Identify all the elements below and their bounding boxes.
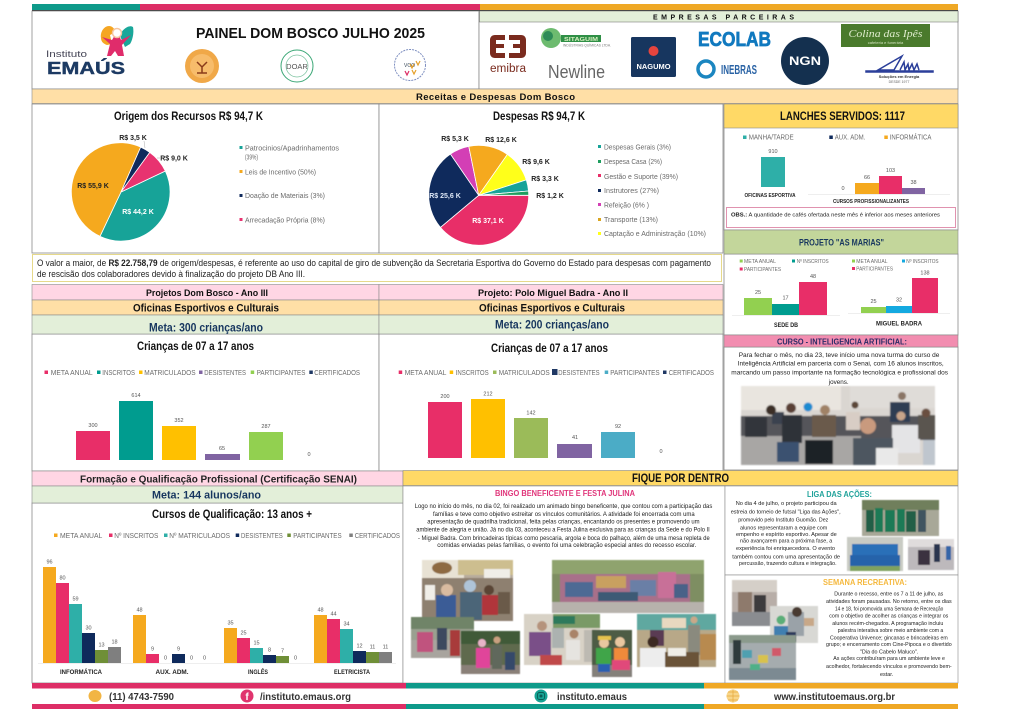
legend: origem: (39%) <box>245 154 258 162</box>
heading: empresas parceiras: EMPRESAS PARCEIRAS <box>653 14 794 22</box>
text block: empenho e espírito esportivo. Apesar de <box>736 532 837 538</box>
pie labels: R$ 5,3 K <box>441 136 469 143</box>
bar chart: cursos: CURSOS PROFISSIONALIZANTES <box>833 199 910 205</box>
group: informática <box>43 560 121 676</box>
bar chart: cursos <box>38 560 396 676</box>
bar chart: 212 <box>483 392 493 398</box>
legend: miguel badra: META ANUAL <box>856 259 888 265</box>
pie labels <box>429 136 564 225</box>
callout: observação <box>726 208 956 228</box>
group: informática: INFORMÁTICA <box>60 669 103 676</box>
legend: INFORMÁTICA <box>890 132 932 142</box>
group: inglês: 35 <box>227 620 234 626</box>
bar chart: 92 <box>615 424 621 430</box>
text block <box>731 352 949 386</box>
logo: Sitaguim <box>541 28 611 48</box>
icon: facebook: f <box>245 692 249 703</box>
text block: famílias e teve como objetivo estreitar os vínculos comunitários. A atividade foi encerrada com uma <box>433 512 695 518</box>
photo: grupo de crianças <box>552 560 704 613</box>
group: informática: 30 <box>85 626 92 632</box>
legend: META ANUAL <box>51 370 93 377</box>
logo: emibra <box>490 35 527 75</box>
text block <box>415 504 712 549</box>
legend <box>54 533 400 540</box>
bar chart: cursos: 0 <box>841 186 845 192</box>
text block: No dia 4 de julho, o projeto participou da <box>736 501 837 507</box>
panel: projeto as marias <box>724 230 958 335</box>
text block: Inteligência Artificial em parceria com o Senai, com 16 alunos inscritos, <box>738 360 944 368</box>
group: informática: 59 <box>72 596 79 602</box>
legend: origem: Leis de Incentivo (50%) <box>245 170 316 176</box>
pie labels: R$ 12,6 K <box>485 137 517 144</box>
heading: as marias: PROJETO "AS MARIAS" <box>799 238 884 248</box>
legend: despesas <box>598 144 706 238</box>
title: PAINEL DOM BOSCO JULHO 2025 <box>196 25 425 42</box>
text block: percussão, trazendo cultura e integração. <box>739 561 837 567</box>
bar chart: 0 <box>659 449 663 455</box>
heading: oficinas <box>379 300 723 315</box>
bar chart <box>76 393 311 460</box>
bar chart: sede DB: 48 <box>810 274 816 280</box>
heading: fique por dentro <box>403 470 958 486</box>
logo: Colina das Ipês: Colina das Ipês <box>848 29 923 40</box>
legend: sede: Nº INSCRITOS <box>797 258 829 265</box>
group: aux. adm.: 48 <box>136 608 143 614</box>
bar chart: miguel badra: MIGUEL BADRA <box>876 320 922 328</box>
legend: despesas: Instrutores (27%) <box>604 188 659 195</box>
group: eletricista: 11 <box>383 644 388 650</box>
pie labels: R$ 55,9 K <box>77 183 109 190</box>
bar chart: sede DB <box>732 274 840 329</box>
logo: Colina das Ipês: cafeteria e funerária <box>868 40 904 45</box>
logo: NGN: NGN <box>789 54 821 68</box>
top colour bar <box>32 4 958 11</box>
group: eletricista: 12 <box>356 644 363 650</box>
logo: Nagumo: NAGUMO <box>636 64 671 71</box>
heading: lanches: LANCHES SERVIDOS: 1117 <box>780 111 905 123</box>
pie chart: despesas <box>429 145 529 245</box>
icon: phone <box>88 690 102 702</box>
photo: bonecos caipiras <box>592 630 632 677</box>
heading: semana: SEMANA RECREATIVA: <box>823 577 907 587</box>
group: informática: 13 <box>98 642 105 648</box>
bar chart: 65 <box>219 446 225 452</box>
pie labels: R$ 3,5 K <box>119 135 147 142</box>
panel: lanches servidos <box>724 104 958 230</box>
group: inglês <box>224 620 297 676</box>
legend <box>743 132 932 142</box>
phone number: (11) 4743-7590 <box>109 692 174 703</box>
heading: empresas parceiras <box>480 11 958 22</box>
legend: PARTICIPANTES <box>293 533 342 540</box>
heading: formação <box>32 471 403 486</box>
note box <box>32 254 722 282</box>
group: eletricista: 48 <box>317 608 324 614</box>
bar chart: 142 <box>526 410 536 416</box>
heading: meta: Meta: 144 alunos/ano <box>152 490 261 502</box>
chart title: Crianças de 07 a 17 anos <box>137 341 254 353</box>
legend: MATRICULADOS <box>144 370 196 377</box>
group: inglês: 8 <box>268 648 271 654</box>
legend: Nº MATRICULADOS <box>169 533 230 540</box>
logo: Sitaguim: INDÚSTRIAS QUÍMICAS LTDA. <box>563 42 611 48</box>
legend: origem <box>240 146 340 224</box>
legend: miguel badra: PARTICIPANTES <box>856 266 893 272</box>
heading: as marias <box>724 230 958 254</box>
seal: DOAR <box>281 50 313 82</box>
website: www.institutoemaus.org.br <box>773 692 895 703</box>
text block: apresentação de quadrilha tradicional, feita pelas crianças, encantando os presentes e promovendo um <box>427 520 700 526</box>
heading: fique por dentro: FIQUE POR DENTRO <box>632 473 729 485</box>
bar chart: miguel badra: 32 <box>896 298 902 304</box>
text block: - Miguel Badra. Com brincadeiras típicas como pescaria, argola e boca do palhaço, além de uma mesa repleta de <box>418 536 710 542</box>
legend: despesas: Refeição (6% ) <box>604 202 649 210</box>
legend <box>44 370 360 377</box>
legend <box>399 369 714 377</box>
pie labels: R$ 37,1 K <box>472 218 504 225</box>
photo: time azul <box>847 537 903 571</box>
text block: "Dia do Cabelo Maluco". <box>860 650 919 656</box>
facebook handle: /instituto.emaus.org <box>260 692 351 703</box>
chart title: Crianças de 07 a 17 anos <box>491 343 608 355</box>
logo: Nagumo <box>631 37 676 77</box>
text block: As ações contribuíram para um ambiente leve e <box>833 656 945 662</box>
panel: formação e qualificação <box>32 471 403 683</box>
legend: miguel badra <box>852 258 939 272</box>
seal: orange <box>185 49 219 83</box>
group: inglês: 7 <box>281 648 284 654</box>
group: aux. adm.: 9 <box>177 646 180 652</box>
note box: de rescisão dos colaboradores devido à finalização do projeto DB Ano III. <box>37 269 305 280</box>
logo: Instituto Emaús: Instituto <box>46 49 87 59</box>
bar chart: 287 <box>261 424 271 430</box>
icon: website globe <box>726 690 740 702</box>
bar chart: 614 <box>131 393 141 399</box>
text block: jovens. <box>828 379 849 386</box>
bar chart: oficinas: 910 <box>768 149 778 155</box>
heading: projeto: Projeto: Polo Miguel Badra - Ano II <box>478 288 628 298</box>
photo: crianças e monitora <box>770 606 818 643</box>
photo: bingo salão <box>422 560 513 621</box>
chart title: Cursos de Qualificação: 13 anos + <box>152 509 312 521</box>
logo: Instituto Emaús: EMAÚS <box>47 57 125 78</box>
group: aux. adm. <box>133 608 206 676</box>
panel: Polo Miguel Badra <box>379 284 723 471</box>
logo: Ecolab: ECOLAB <box>698 29 771 51</box>
group: aux. adm.: 9 <box>151 646 154 652</box>
bar chart: 352 <box>174 418 184 424</box>
legend: DESISTENTES <box>204 370 246 377</box>
footer: contacts <box>32 688 958 704</box>
logo: Dimi <box>866 56 933 84</box>
logo: emibra: emibra <box>490 63 527 75</box>
photo: crianças em grupo <box>732 580 777 626</box>
text block: Cooperativa Univence; gincanas e brincadeiras em <box>830 636 948 642</box>
heading: meta <box>379 315 723 334</box>
text block: também contou com uma apresentação de <box>732 554 840 560</box>
legend: CERTIFICADOS <box>355 533 400 540</box>
legend: miguel badra: Nº INSCRITOS <box>906 258 939 265</box>
legend: despesas: Despesa Casa (2%) <box>604 159 662 166</box>
icon: instagram <box>534 690 548 702</box>
footer colour bar: bottom <box>32 704 958 709</box>
logo: NGN <box>781 37 829 85</box>
legend: INSCRITOS <box>456 370 489 377</box>
heading: curso: CURSO - INTELIGENCIA ARTIFICIAL: <box>777 338 907 346</box>
text block: com o objetivo de acolher as crianças e integrar os <box>829 614 948 620</box>
panel: semana recreativa <box>725 575 958 683</box>
group: inglês: INGLÊS <box>248 668 268 676</box>
callout: observação: OBS.: A quantidade de cafés ofertada neste mês é inferior aos meses anteriores <box>731 212 940 218</box>
heading: meta <box>32 315 379 334</box>
legend: PARTICIPANTES <box>257 370 306 377</box>
bar chart: sede DB: SEDE DB <box>774 322 798 329</box>
text block: estreia do torneio de futsal "Liga das Ações", <box>731 509 841 515</box>
text block <box>826 592 952 678</box>
logo: Dimi: DESDE 1977 <box>889 80 909 84</box>
logo: Dimi: Soluções em Energia <box>879 74 920 79</box>
legend: despesas: Gestão e Suporte (39%) <box>604 174 678 181</box>
pie labels: R$ 3,3 K <box>531 176 559 183</box>
pie labels <box>77 135 188 216</box>
legend: origem: Arrecadação Própria (8%) <box>245 218 325 224</box>
instagram handle: instituto.emaus <box>557 692 627 703</box>
text block: alunos representaram a equipe com <box>740 525 827 531</box>
chart title: Origem dos Recursos R$ 94,7 K <box>114 111 264 123</box>
bar chart: miguel badra <box>848 270 950 328</box>
group: aux. adm.: 0 <box>190 656 193 662</box>
bar chart: 0 <box>307 452 311 458</box>
bar chart: oficinas: OFICINAS ESPORTIVA <box>744 193 796 199</box>
legend: despesas: Transporte (13%) <box>604 217 658 224</box>
logo: Newline: Newline <box>548 62 605 82</box>
heading: projeto <box>32 284 379 300</box>
group: eletricista: 11 <box>370 644 375 650</box>
bar chart: cursos: 38 <box>910 180 917 186</box>
pie labels: R$ 25,6 K <box>429 193 461 200</box>
heading: receitas e despesas <box>32 89 958 104</box>
heading: projeto: Projetos Dom Bosco - Ano III <box>146 288 268 298</box>
text block: palestra interativa sobre meio ambiente com a <box>838 628 944 634</box>
group: inglês: 25 <box>240 630 247 636</box>
heading: oficinas: Oficinas Esportivos e Culturais <box>133 302 279 314</box>
legend: despesas: Despesas Gerais (3%) <box>604 144 671 152</box>
legend: INSCRITOS <box>102 370 135 377</box>
legend: AUX. ADM. <box>835 134 865 142</box>
icon: facebook <box>240 690 254 703</box>
photo: time verde <box>862 500 939 536</box>
heading: meta: Meta: 300 crianças/ano <box>149 322 263 334</box>
bar chart: miguel badra: 138 <box>920 270 930 276</box>
heading: lanches <box>724 104 958 128</box>
text block: alunos recém-chegados. A programação incluiu <box>832 621 943 627</box>
group: aux. adm.: 0 <box>203 656 206 662</box>
seal: voluntariado: VOO <box>404 63 415 69</box>
heading: curso <box>724 335 958 347</box>
text block: experiência foi enriquecedora. O evento <box>736 546 835 552</box>
heading: oficinas <box>32 300 379 315</box>
legend: DESISTENTES <box>241 533 283 540</box>
panel: curso inteligência artificial <box>724 335 958 470</box>
footer colour bar: top <box>32 683 958 688</box>
bar chart: 41 <box>572 435 578 441</box>
photo: quadrilha <box>411 617 474 658</box>
panel: bingo e festa julina <box>403 486 725 683</box>
text block <box>731 501 841 567</box>
group: informática: 96 <box>46 560 53 566</box>
text block: acolhedor, fortalecendo vínculos e promovendo bem- <box>826 664 952 670</box>
pie labels: R$ 44,2 K <box>122 209 154 216</box>
panel: despesas <box>379 104 723 253</box>
text block: comidas enviadas pelas famílias, o evento foi uma celebração especial antes do recesso escolar. <box>437 543 697 549</box>
logo: Colina das Ipês <box>841 24 930 47</box>
text block: grupo; e encerramento com Cine-Pipoca e o divertido <box>826 642 952 648</box>
heading: bingo: BINGO BENEFICENTE E FESTA JULINA <box>495 489 635 498</box>
bar chart: sede DB: 25 <box>755 290 761 296</box>
legend: CERTIFICADOS <box>314 370 360 377</box>
legend: DESISTENTES <box>558 370 600 377</box>
bar chart: cursos <box>808 168 950 205</box>
legend: sede: META ANUAL <box>744 259 776 265</box>
photo: crianças fantasiadas <box>461 631 520 674</box>
group: aux. adm.: AUX. ADM. <box>156 669 189 676</box>
chart title: Despesas R$ 94,7 K <box>493 111 586 123</box>
group: eletricista: 44 <box>330 612 337 618</box>
legend: PARTICIPANTES <box>610 370 660 377</box>
legend: MANHA/TARDE <box>749 134 794 142</box>
bar chart: oficinas <box>744 149 796 199</box>
group: informática: 18 <box>111 640 118 646</box>
text block: Durante o recesso, entre os 7 a 11 de julho, as <box>834 592 943 598</box>
pie chart: origem <box>71 143 170 241</box>
legend: origem: Patrocinios/Apadrinhamentos <box>245 146 340 152</box>
group: eletricista: ELETRICISTA <box>334 669 370 676</box>
header: title and logos <box>32 11 479 89</box>
photo: sala de informática <box>741 386 935 465</box>
bar chart: cursos: 103 <box>886 168 895 174</box>
heading: meta <box>32 486 403 503</box>
legend: sede: PARTICIPANTES <box>744 267 781 273</box>
legend: META ANUAL <box>60 533 102 540</box>
seal: voluntariado <box>394 50 426 80</box>
bar chart: miguel badra: 25 <box>870 299 877 305</box>
heading: meta: Meta: 200 crianças/ano <box>495 320 609 332</box>
group: aux. adm.: 0 <box>164 656 167 662</box>
pie labels: R$ 9,6 K <box>522 159 550 166</box>
bar chart: 200 <box>440 394 450 400</box>
text block: marcando um passo importante na formação tecnológica e profissional dos <box>731 370 949 376</box>
group: eletricista <box>314 608 392 676</box>
seal: DOAR: DOAR <box>286 62 308 71</box>
panel: liga das ações <box>725 486 958 575</box>
text block: atividades foram pausadas. No retorno, entre os dias <box>826 599 952 605</box>
logo: Inebras: INEBRAS <box>721 62 757 77</box>
group: inglês: 15 <box>253 640 260 646</box>
heading: formação: Formação e Qualificação Profissional (Certificação SENAI) <box>80 474 357 486</box>
panel: Projetos Dom Bosco <box>32 284 379 471</box>
legend: sede <box>740 258 829 273</box>
legend: Nº INSCRITOS <box>114 533 159 540</box>
legend: origem: Doação de Materiais (3%) <box>245 193 325 200</box>
logo: Instituto Emaús <box>46 26 133 78</box>
panel: origem dos recursos <box>32 104 379 253</box>
pie labels: R$ 1,2 K <box>536 193 564 200</box>
note box: O valor a maior, de R$ 22.758,79 de origem/despesas, é referente ao uso do capital de giro de subvenção da Secretaria Esportiva do Governo do Estado para despesas com pagamento <box>37 258 711 269</box>
pie labels: R$ 9,0 K <box>160 156 188 162</box>
photo: jogo <box>908 539 954 570</box>
legend: META ANUAL <box>405 370 446 377</box>
text block: estar. <box>880 672 894 678</box>
bar chart: sede DB: 17 <box>782 296 789 302</box>
text block: não avançarem para a próxima fase, a <box>740 538 833 544</box>
group: informática: 80 <box>59 576 66 582</box>
bar chart <box>428 392 663 458</box>
text block: 14 e 18, foi promovida uma Semana de Recreação <box>835 606 943 612</box>
group: eletricista: 34 <box>343 622 350 628</box>
legend: CERTIFICADOS <box>669 370 714 377</box>
text block: ambiente de alegria e união. Já no dia 03, aconteceu a Festa Julina exclusiva para as crianças da Sede e do Polo II <box>416 528 710 534</box>
group: inglês: 0 <box>294 656 297 662</box>
text block: Logo no início do mês, no dia 02, foi realizado um animado bingo beneficente, que contou com a participação das <box>415 504 712 510</box>
photo: sala de aula <box>637 614 716 667</box>
logo: Inebras <box>698 61 757 77</box>
heading: receitas e despesas: Receitas e Despesas Dom Bosco <box>416 92 575 103</box>
logo: Sitaguim: SITAGUIM <box>564 37 599 43</box>
text block: Para fechar o mês, no dia 23, teve início uma nova turma do curso de <box>739 352 940 359</box>
heading: liga: LIGA DAS AÇÕES: <box>807 489 872 499</box>
heading: projeto <box>379 284 723 300</box>
heading: oficinas: Oficinas Esportivos e Culturais <box>479 302 625 314</box>
photo: barraca <box>524 614 600 665</box>
photo: tapete colorido <box>729 635 796 680</box>
bar chart: cursos: 66 <box>864 175 870 181</box>
bar chart: 300 <box>88 423 98 429</box>
legend: MATRICULADOS <box>499 370 550 377</box>
text block: promovido pelo Instituto Guomão. Dez <box>738 518 828 524</box>
panel: empresas parceiras <box>479 11 958 89</box>
legend: despesas: Captação e Administração (10%) <box>604 231 706 238</box>
